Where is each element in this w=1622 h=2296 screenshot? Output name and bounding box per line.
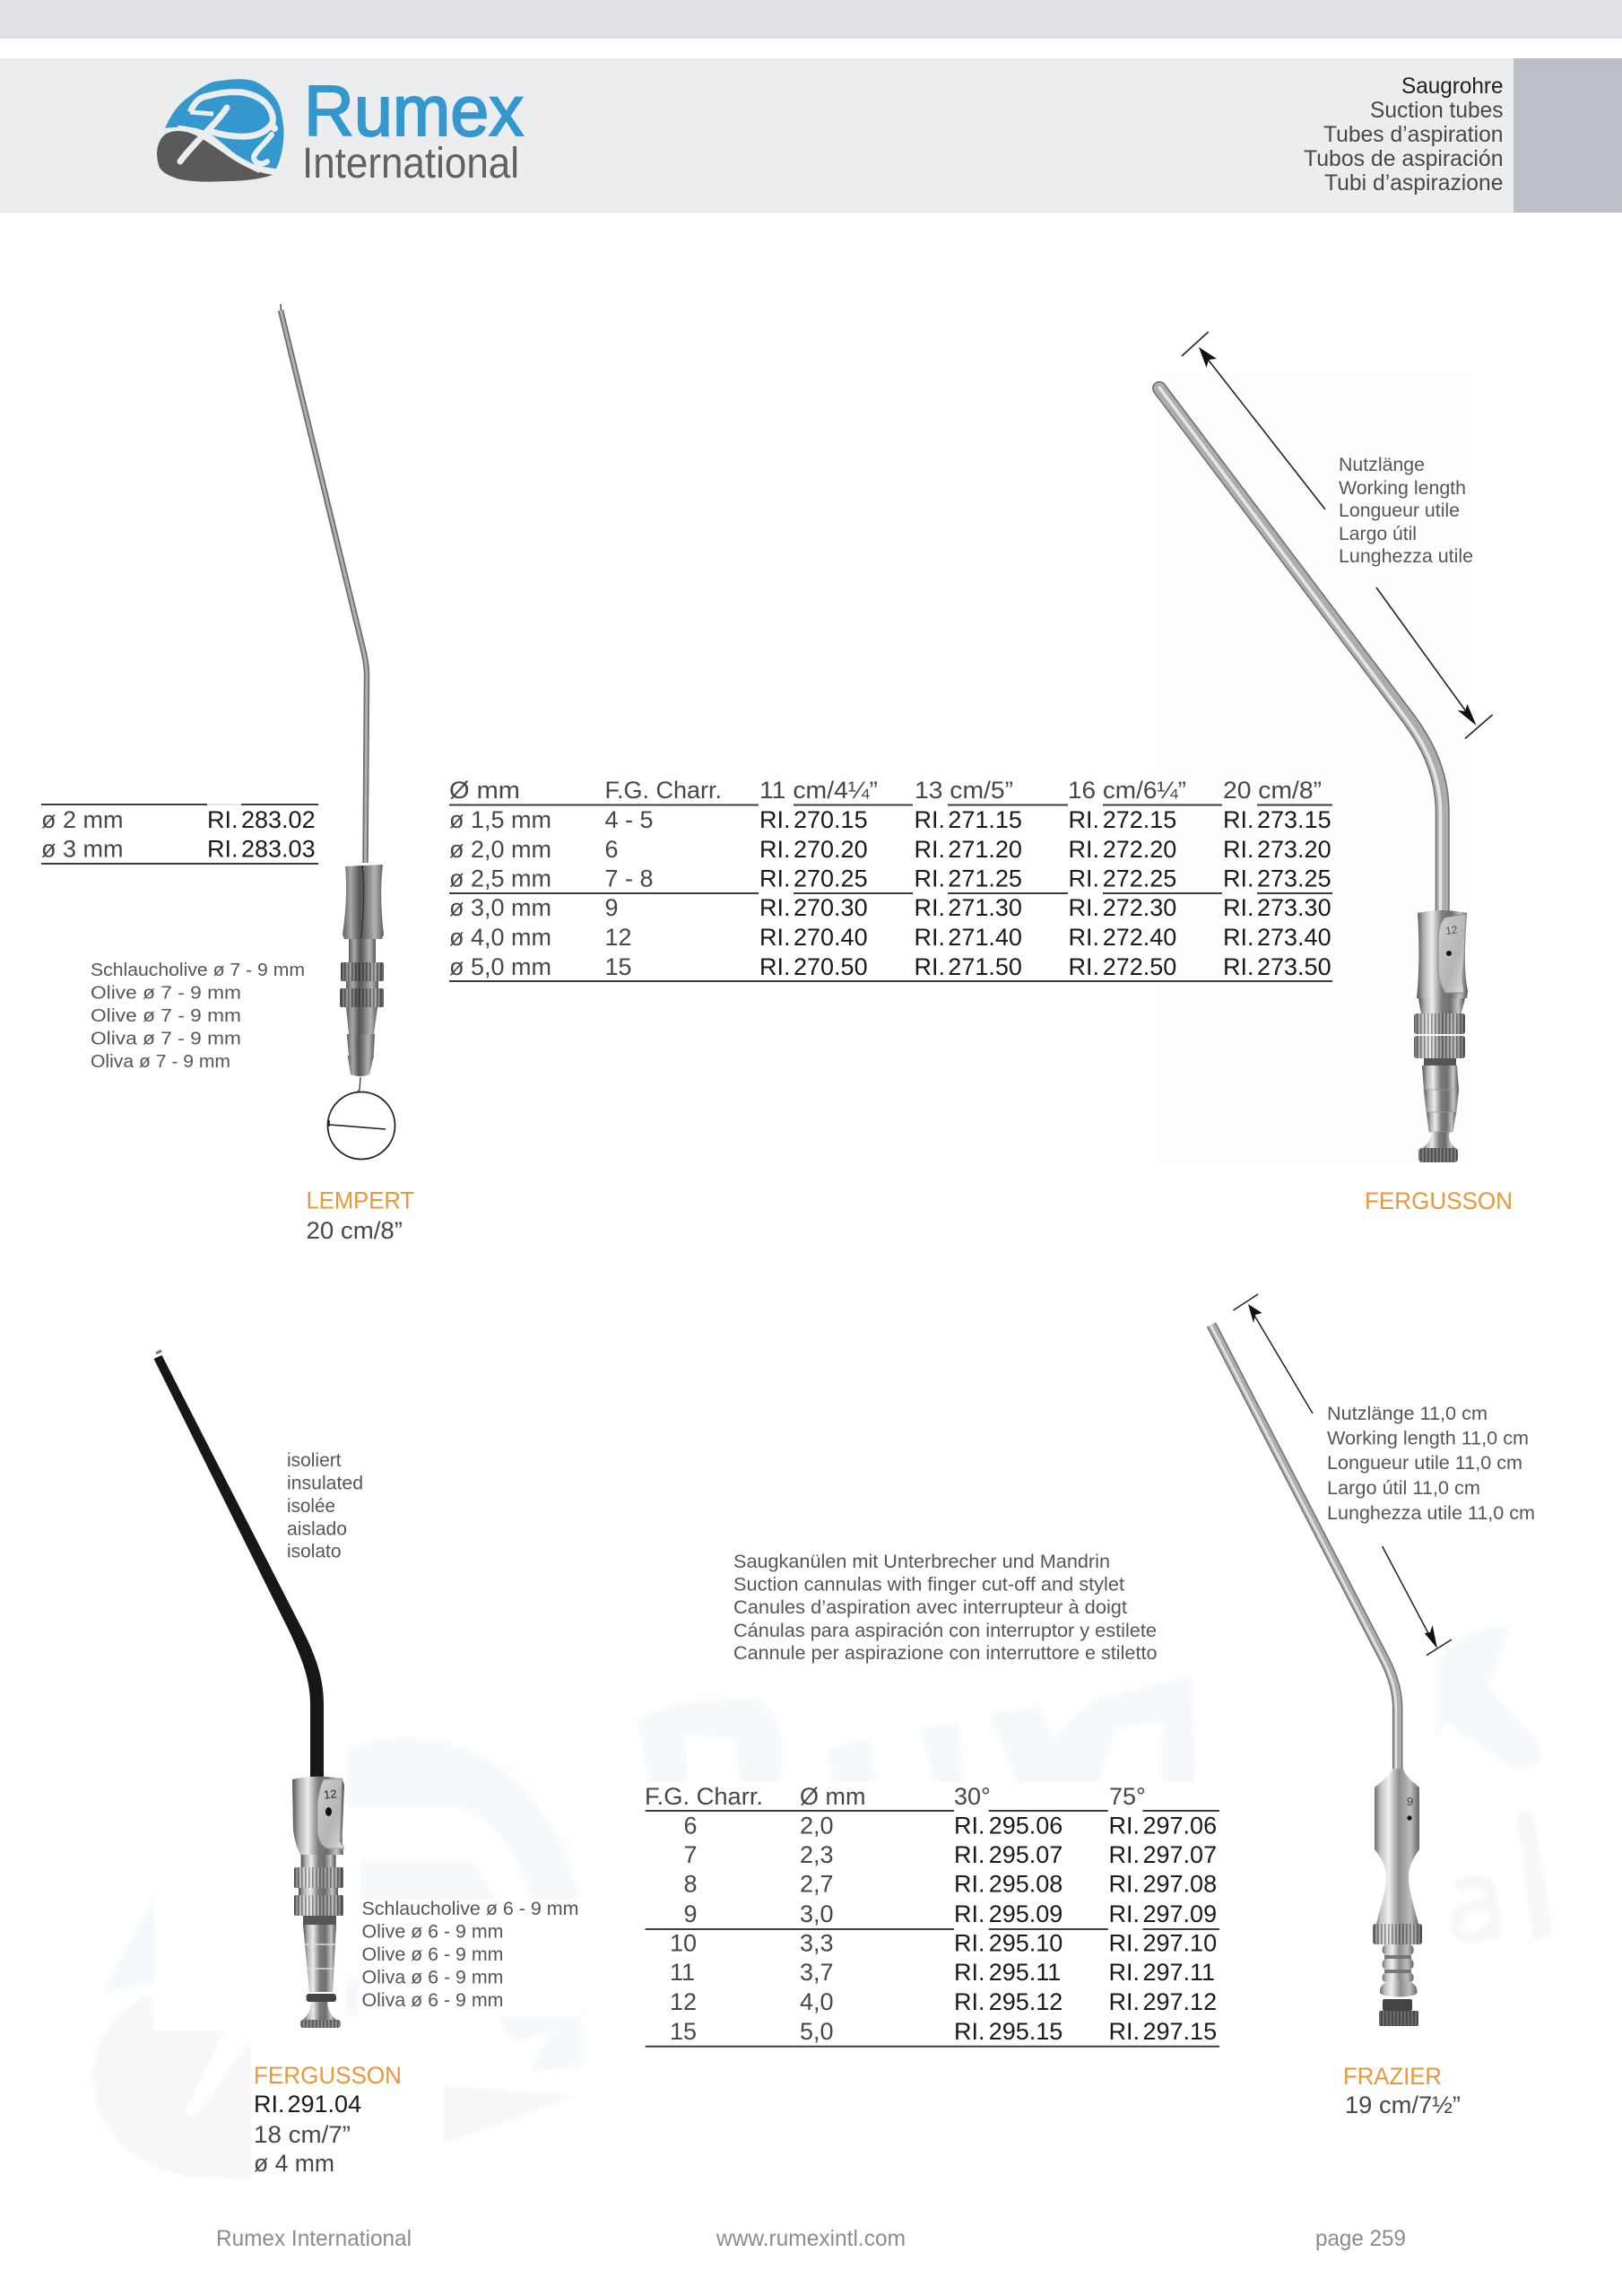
row: 4,0 mm: RI.	[759, 924, 791, 951]
row: 2,5 mm: 272.25	[1103, 865, 1176, 891]
icon: cross-section circle	[328, 1092, 395, 1159]
label: Lempert: 20 cm/8”	[307, 1217, 403, 1244]
row: 2,5 mm: RI.	[759, 865, 791, 891]
row: 3,0 mm: 9	[604, 894, 619, 921]
arrow: working length dimension	[1182, 332, 1492, 739]
row: 4,0 mm: 273.40	[1257, 924, 1331, 951]
row: 3 mm: 283.03	[241, 836, 316, 863]
header: 16 cm: 16 cm/6¼”	[1068, 777, 1186, 804]
row: 9: 297.09	[1142, 1900, 1217, 1927]
row: 9: RI.	[1108, 1900, 1140, 1927]
instrument: insulated Fergusson tube: 12	[323, 1787, 337, 1802]
row: 2,0 mm: RI.	[915, 836, 945, 863]
text: insulated note: insulated	[287, 1473, 363, 1494]
row: 2,0 mm: 6	[604, 836, 619, 863]
text: working length 11 cm note: Working length 11,0 cm	[1327, 1428, 1529, 1449]
row: 1,5 mm: RI.	[915, 806, 945, 833]
text: hose olive note, Lempert: Olive ø 7 - 9 mm	[91, 983, 241, 1003]
row: 1,5 mm: 272.15	[1103, 806, 1176, 833]
row: 10: 10	[670, 1930, 697, 1957]
logo wordmark: International	[302, 140, 519, 187]
row: 2,5 mm: 273.25	[1257, 865, 1331, 891]
row: 1,5 mm: RI.	[1069, 806, 1099, 833]
text: insulated note: isoliert	[287, 1450, 342, 1471]
row: 5,0 mm: 273.50	[1257, 953, 1331, 980]
row: 7: 2,3	[800, 1841, 834, 1868]
row: 1,5 mm: ø 1,5 mm	[449, 806, 551, 833]
row: 10: 297.10	[1142, 1930, 1217, 1957]
row: 4,0 mm: 270.40	[794, 924, 868, 951]
logo	[157, 71, 524, 187]
row: 8: 8	[683, 1871, 698, 1898]
row: 4,0 mm: ø 4,0 mm	[449, 924, 551, 951]
footer: company name: Rumex International	[216, 2226, 412, 2251]
row: 3,0 mm: RI.	[1069, 894, 1099, 921]
text: cannula description: Cannule per aspirazione con interruttore e stiletto	[733, 1643, 1157, 1664]
row: 2,5 mm: 270.25	[794, 865, 868, 891]
row: 6: RI.	[954, 1812, 985, 1839]
row: 12: 295.12	[989, 1988, 1063, 2015]
row: 15: 295.15	[989, 2018, 1063, 2045]
text: hose olive note, Lempert: Oliva ø 7 - 9 mm	[91, 1051, 230, 1072]
header: 13 cm: 13 cm/5”	[915, 777, 1013, 804]
row: 7: 295.07	[989, 1841, 1063, 1868]
row: 2,5 mm: RI.	[1069, 865, 1099, 891]
footer	[216, 2226, 1406, 2251]
header: diameter, angles: 75°	[1109, 1783, 1146, 1810]
text: working length note: Lunghezza utile	[1339, 546, 1473, 567]
instrument: Frazier suction tube	[1210, 1294, 1452, 2026]
row: 2,0 mm: ø 2,0 mm	[449, 836, 551, 863]
row: 2,0 mm: 273.20	[1257, 836, 1331, 863]
section title in five languages: Suction tubes	[1370, 98, 1503, 123]
row: 8: 297.08	[1142, 1871, 1217, 1898]
row: 2 mm: 283.02	[241, 806, 316, 833]
table: main size and code table	[449, 777, 1332, 981]
text: working length note: Longueur utile	[1339, 500, 1460, 521]
row: 3 mm: RI.	[207, 836, 239, 863]
text: hose olive note, Fergusson: Oliva ø 6 - 9 mm	[362, 1968, 504, 1987]
row: 10: 295.10	[989, 1930, 1063, 1957]
instrument: Fergusson suction tube	[1159, 332, 1492, 1162]
table: cannula sizes and codes	[645, 1783, 1219, 2047]
text: working length note: Largo útil	[1339, 524, 1417, 544]
row: 11: 11	[670, 1959, 695, 1986]
icon: Ri logo mark	[157, 79, 284, 182]
row: 11: 297.11	[1142, 1959, 1215, 1986]
row: 3,0 mm: ø 3,0 mm	[449, 894, 551, 921]
faint photo background, top right	[1158, 374, 1470, 1164]
row: 4,0 mm: RI.	[1223, 924, 1254, 951]
text: insulated note	[287, 1450, 363, 1562]
instrument: Lempert suction tube	[281, 304, 395, 1159]
row: 12: RI.	[1108, 1988, 1140, 2015]
row: 2 mm: RI.	[207, 806, 239, 833]
row: 3,0 mm: 271.30	[948, 894, 1022, 921]
row: 1,5 mm: RI.	[1223, 806, 1254, 833]
row: 6: 295.06	[989, 1812, 1063, 1839]
label: Frazier: 19 cm/7½”	[1345, 2092, 1461, 2118]
label: Fergusson RI.291.04: RI.	[254, 2091, 285, 2118]
row: 11: 3,7	[800, 1959, 834, 1986]
text: hose olive note, Fergusson: Olive ø 6 - 9 mm	[362, 1921, 504, 1943]
text: insulated note: aislado	[287, 1519, 347, 1539]
row: 4,0 mm: 271.40	[948, 924, 1022, 951]
row: 15: 5,0	[800, 2018, 834, 2045]
text: working length 11 cm note: Longueur utile 11,0 cm	[1327, 1453, 1522, 1474]
row: 10: 3,3	[800, 1930, 834, 1957]
row: 6: 6	[683, 1812, 698, 1839]
row: 10: RI.	[1108, 1930, 1140, 1957]
row: 12: 12	[670, 1988, 697, 2015]
text: cannula description: Cánulas para aspiración con interruptor y estilete	[733, 1621, 1157, 1641]
row: 3,0 mm: RI.	[759, 894, 791, 921]
arrow: working length dimension	[1234, 1294, 1452, 1656]
header panel	[0, 58, 1622, 213]
section title in five languages	[1304, 74, 1503, 196]
row: 5,0 mm: RI.	[1069, 953, 1099, 980]
row: 8: 295.08	[989, 1871, 1063, 1898]
row: 15: RI.	[1108, 2018, 1140, 2045]
row: 9: RI.	[954, 1900, 985, 1927]
row: 7: 297.07	[1142, 1841, 1217, 1868]
footer: page number: page 259	[1315, 2226, 1406, 2251]
row: 3,0 mm: 272.30	[1103, 894, 1176, 921]
row: 1,5 mm: 270.15	[794, 806, 868, 833]
row: 5,0 mm: 271.50	[948, 953, 1022, 980]
text: working length 11 cm note: Largo útil 11,0 cm	[1327, 1478, 1480, 1499]
header: diameter: Ø mm	[449, 777, 520, 804]
row: 5,0 mm: 15	[604, 953, 632, 980]
text: insulated note: isolato	[287, 1541, 341, 1562]
row: 11: RI.	[954, 1959, 985, 1986]
row: 9: 295.09	[989, 1900, 1063, 1927]
instrument: insulated Fergusson tube	[154, 1351, 344, 2028]
row: 7: RI.	[954, 1841, 985, 1868]
row: 11: RI.	[1108, 1959, 1140, 1986]
instrument: Frazier suction tube: 9	[1407, 1795, 1413, 1808]
text: hose olive note, Fergusson: Olive ø 6 - 9 mm	[362, 1944, 504, 1965]
label: Fergusson RI.291.04: 18 cm/7”	[254, 2121, 351, 2148]
text: working length note: Nutzlänge	[1339, 455, 1425, 475]
row: 12: RI.	[954, 1988, 985, 2015]
footer: website: www.rumexintl.com	[716, 2226, 906, 2251]
section title in five languages: Saugrohre	[1401, 74, 1503, 99]
row: 12: 4,0	[800, 1988, 834, 2015]
row: 8: 2,7	[800, 1871, 834, 1898]
header: French gauge: F.G. Charr.	[604, 777, 722, 804]
label: Fergusson RI.291.04	[254, 2062, 402, 2177]
row: 2,0 mm: 272.20	[1103, 836, 1176, 863]
section title in five languages: Tubi d’aspirazione	[1324, 170, 1503, 196]
row: 4,0 mm: 272.40	[1103, 924, 1176, 951]
row: 2,5 mm: RI.	[1223, 865, 1254, 891]
row: 6: 297.06	[1142, 1812, 1217, 1839]
text: cannula description: Saugkanülen mit Unterbrecher und Mandrin	[733, 1552, 1110, 1572]
row: 1,5 mm: 4 - 5	[604, 806, 654, 833]
row: 2,5 mm: ø 2,5 mm	[449, 865, 551, 891]
text: hose olive note, Fergusson: Oliva ø 6 - 9 mm	[362, 1990, 504, 2011]
text: hose olive note, Lempert: Oliva ø 7 - 9 mm	[91, 1028, 241, 1049]
text: hose olive note, Lempert: Schlaucholive ø 7 - 9 mm	[91, 960, 305, 980]
row: 15: RI.	[954, 2018, 985, 2045]
row: 7: RI.	[1108, 1841, 1140, 1868]
top grey band	[0, 0, 1622, 39]
label: Frazier: FRAZIER	[1343, 2063, 1442, 2090]
row: 2,5 mm: RI.	[915, 865, 945, 891]
row: 5,0 mm: ø 5,0 mm	[449, 953, 551, 980]
row: 12: 297.12	[1142, 1988, 1217, 2015]
text: working length 11 cm note: Nutzlänge 11,0 cm	[1327, 1404, 1488, 1424]
header: diameter, angles: Ø mm	[800, 1783, 866, 1810]
row: 2,0 mm: RI.	[1223, 836, 1254, 863]
label: Fergusson RI.291.04: FERGUSSON	[254, 2062, 402, 2089]
section title in five languages: Tubes d’aspiration	[1323, 122, 1503, 147]
row: 2,5 mm: 271.25	[948, 865, 1022, 891]
row: 3,0 mm: RI.	[1223, 894, 1254, 921]
label: Lempert: LEMPERT	[307, 1187, 414, 1214]
row: 2 mm: ø 2 mm	[41, 806, 124, 833]
text: working length note	[1339, 455, 1473, 567]
row: 2,0 mm: RI.	[1069, 836, 1099, 863]
row: 5,0 mm: 272.50	[1103, 953, 1176, 980]
row: 9: 9	[683, 1900, 698, 1927]
row: 15: 297.15	[1142, 2018, 1217, 2045]
section title in five languages: Tubos de aspiración	[1304, 146, 1503, 171]
text: hose olive note, Lempert	[91, 960, 305, 1072]
label: Fergusson RI.291.04: ø 4 mm	[254, 2150, 334, 2177]
watermark: faded Rumex logo	[93, 1345, 1552, 2181]
row: 2,5 mm: 7 - 8	[604, 865, 654, 891]
row: 3,0 mm: RI.	[915, 894, 945, 921]
text: hose olive note, Lempert: Olive ø 7 - 9 mm	[91, 1005, 241, 1026]
row: 2,0 mm: RI.	[759, 836, 791, 863]
header: 11 cm: 11 cm/4¼”	[759, 777, 878, 804]
label: Fergusson RI.291.04: 291.04	[287, 2091, 361, 2118]
row: 15: 15	[670, 2018, 697, 2045]
text: working length note: Working length	[1339, 478, 1466, 499]
row: 7: 7	[683, 1841, 698, 1868]
header: French gauge: F.G. Charr.	[645, 1783, 763, 1810]
row: 5,0 mm: RI.	[1223, 953, 1254, 980]
label: Fergusson: FERGUSSON	[1365, 1187, 1513, 1214]
row: 4,0 mm: RI.	[915, 924, 945, 951]
logo wordmark	[302, 71, 524, 187]
table: Lempert references	[41, 804, 318, 864]
header: 20 cm: 20 cm/8”	[1223, 777, 1322, 804]
text: cannula description: Canules d’aspiration avec interrupteur à doigt	[733, 1597, 1127, 1618]
text: cannula description: Suction cannulas with finger cut-off and stylet	[733, 1575, 1124, 1595]
instrument: Fergusson suction tube: 12	[1444, 923, 1459, 937]
row: 1,5 mm: 273.15	[1257, 806, 1331, 833]
row: 3 mm: ø 3 mm	[41, 836, 124, 863]
row: 6: RI.	[1108, 1812, 1140, 1839]
row: 6: 2,0	[800, 1812, 834, 1839]
text: working length 11 cm note	[1327, 1404, 1535, 1524]
row: 2,0 mm: 270.20	[794, 836, 868, 863]
text: hose olive note, Fergusson	[362, 1899, 579, 2011]
row: 1,5 mm: RI.	[759, 806, 791, 833]
text: insulated note: isolée	[287, 1496, 335, 1517]
row: 3,0 mm: 273.30	[1257, 894, 1331, 921]
row: 5,0 mm: RI.	[759, 953, 791, 980]
text: cannula description	[733, 1552, 1157, 1664]
text: working length 11 cm note: Lunghezza utile 11,0 cm	[1327, 1503, 1535, 1524]
row: 8: RI.	[954, 1871, 985, 1898]
label: Lempert	[307, 1187, 414, 1244]
header: diameter, angles: 30°	[954, 1783, 991, 1810]
row: 3,0 mm: 270.30	[794, 894, 868, 921]
row: 4,0 mm: 12	[604, 924, 632, 951]
row: 2,0 mm: 271.20	[948, 836, 1022, 863]
row: 4,0 mm: RI.	[1069, 924, 1099, 951]
row: 5,0 mm: RI.	[915, 953, 945, 980]
logo wordmark: Rumex	[304, 71, 524, 151]
row: 11: 295.11	[989, 1959, 1061, 1986]
text: hose olive note, Fergusson: Schlaucholive ø 6 - 9 mm	[362, 1899, 579, 1919]
row: 1,5 mm: 271.15	[948, 806, 1022, 833]
row: 5,0 mm: 270.50	[794, 953, 868, 980]
row: 9: 3,0	[800, 1900, 834, 1927]
label: Frazier	[1343, 2063, 1461, 2118]
row: 8: RI.	[1108, 1871, 1140, 1898]
row: 10: RI.	[954, 1930, 985, 1957]
